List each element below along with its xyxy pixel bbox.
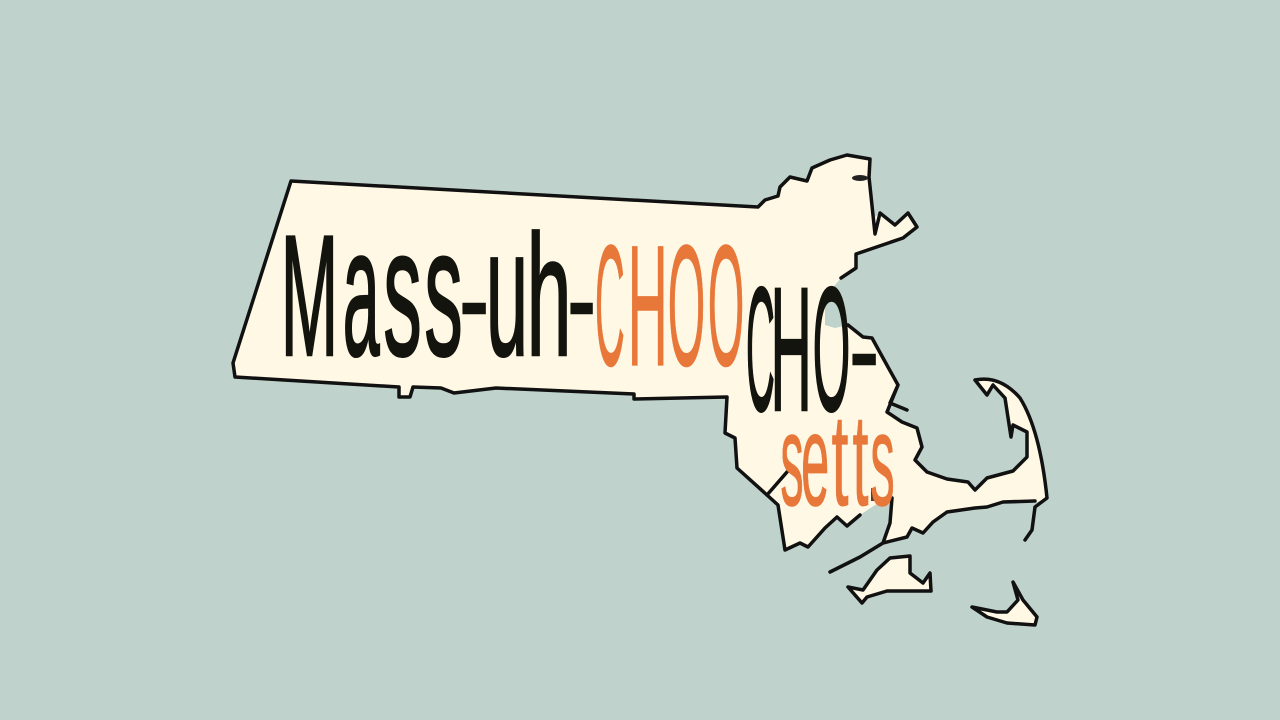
syllable: setts: t [852,386,868,533]
syllable: setts: e [801,386,829,533]
mainland outline: north and west [233,155,917,550]
infographic: Massachusetts pronunciation map: s [870,386,895,533]
title text [281,189,895,533]
syllable: Mass-uh-: - [568,236,596,364]
syllable: Mass-uh-: a [343,189,380,394]
title text: O [813,252,850,448]
syllable: CHO-: H [770,252,812,448]
title text: O [708,210,744,402]
syllable: Mass-uh-: s [424,189,463,394]
syllable: Mass-uh-: s [383,189,422,394]
mainland outline: south shore and Cape Cod bay [848,325,1047,540]
island: Martha's Vineyard [848,556,931,603]
detail: bay mark [871,488,876,501]
syllable: setts: t [832,386,848,533]
syllable: CHO-: - [850,287,879,415]
syllable: CHOO: H [628,210,668,402]
map of Massachusetts [233,155,1047,625]
syllable: Mass-uh-: h [527,200,572,392]
detail: northern inlet mark [852,175,868,181]
syllable: Mass-uh-: M [281,200,338,392]
island: Nantucket [972,582,1037,625]
syllable: Mass-uh-: - [460,236,489,364]
mainland fill [233,155,1047,550]
syllable: setts: s [780,386,804,533]
syllable: CHOO: C [595,210,625,402]
syllable: Mass-uh-: u [486,189,528,394]
syllable: CHO-: C [746,252,775,448]
syllable: CHOO: O [668,210,705,402]
mainland outline: south coast of the Cape [767,472,1035,572]
